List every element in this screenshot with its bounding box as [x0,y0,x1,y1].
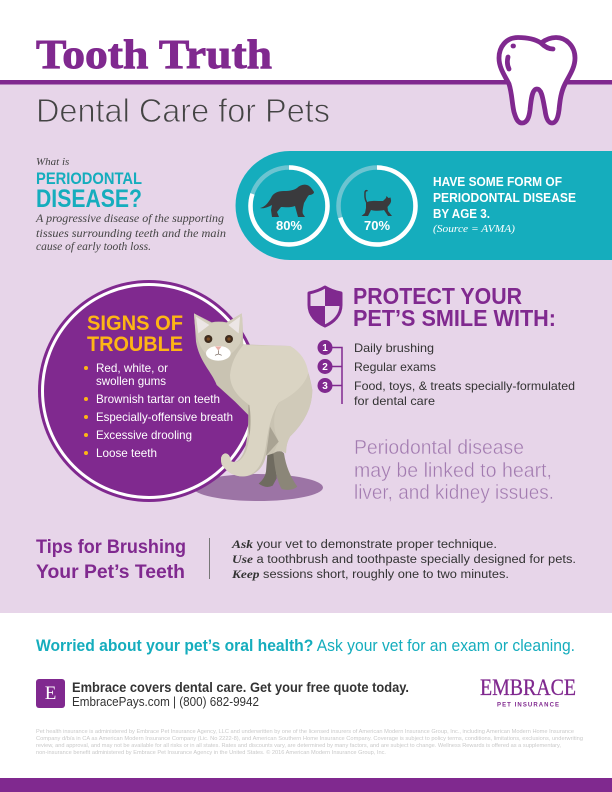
text block: what is periodontal disease: tissues surrounding teeth and the main [36,228,226,240]
fine print: Company d/b/a in CA as American Modern Insurance Company (Lic. No 2222-8), and American Southern Home Insurance Company. Coverage is subject to policy terms, conditions, limitations, exclusions, underwriting [36,736,583,742]
cat far leg [259,452,277,487]
footer band [0,778,612,792]
numbered list: protection steps: 2 [322,362,328,373]
text block: what is periodontal disease: PERIODONTAL [36,170,142,188]
chart: dog 80 percent ring: 80% [276,218,302,233]
numbered list: protection steps: 3 [322,381,328,392]
call to action: oral health: Worried about your pet’s oral health? Ask your vet for an exam or cleaning. [36,636,575,655]
statistic text [433,175,576,235]
heading: protect your pet's smile [353,283,556,331]
callout: linked issues: may be linked to heart, [354,460,552,482]
numbered list: protection steps: Regular exams [354,360,436,374]
cat shaded wedges [248,405,279,456]
icon: shield [309,287,341,326]
text block: what is periodontal disease: cause of early tooth loss. [36,241,151,253]
list: signs: Excessive drooling [96,428,192,442]
text block: what is periodontal disease: DISEASE? [36,185,142,213]
cat shadow [193,474,323,501]
text block: brushing tips: Keep sessions short, roughly one to two minutes. [231,567,509,581]
text block: what is periodontal disease: What is [36,156,69,168]
icon: tooth [499,38,575,123]
panel: statistics pill [236,151,612,260]
callout: linked issues: liver, and kidney issues. [354,482,554,504]
fine print [36,729,583,756]
statistic text: BY AGE 3. [433,207,490,221]
callout: linked issues [354,437,554,504]
cat near leg [273,451,297,490]
numbered list: protection steps: for dental care [354,394,435,408]
logo: embrace pet insurance: PET INSURANCE [497,702,559,708]
logo: embrace pet insurance: EMBRACE [480,675,576,700]
cat silhouette [194,313,312,476]
heading: tips for brushing: Tips for Brushing [36,536,186,558]
title: Tooth Truth [36,31,272,77]
list: signs: Especially-offensive breath [96,410,233,424]
callout: linked issues: Periodontal disease [354,437,524,459]
numbered list: protection steps [318,340,575,408]
statistic text: HAVE SOME FORM OF [433,175,562,189]
cat ears [196,317,209,333]
cat head [194,313,243,361]
text block: what is periodontal disease: A progressive disease of the supporting [35,213,224,225]
cat muzzle [206,346,231,361]
list: signs: Red, white, or [96,361,168,375]
cat body and tail [221,345,308,476]
chart: cat 70 percent ring: 70% [364,218,390,233]
text block: what is periodontal disease [35,156,226,253]
heading: tips for brushing: Your Pet’s Teeth [36,561,185,583]
lilac background panel [0,82,612,613]
logo: embrace pet insurance [480,675,576,708]
chart: cat 70 percent ring [338,168,416,244]
chart: dog 80 percent ring [250,168,328,244]
list: signs [84,361,233,460]
heading: signs of trouble: SIGNS OF [87,312,183,335]
numbered list: protection steps: Daily brushing [354,341,434,355]
fine print: non-insurance benefit administered by Embrace Pet Insurance Agency in the United States. © 2016 American Modern Insurance Group, Inc. [36,749,386,756]
list: signs: Brownish tartar on teeth [96,392,220,406]
statistic text: (Source = AVMA) [433,224,516,235]
icon: embrace E badge: E [45,683,56,704]
heading: protect your pet's smile: PET’S SMILE WITH: [353,305,556,331]
text block: brushing tips: Ask your vet to demonstrate proper technique. [231,537,497,551]
cat eyes [204,335,212,343]
header rule [0,80,612,84]
heading: protect your pet's smile: PROTECT YOUR [353,283,522,309]
list: signs: swollen gums [96,374,166,388]
heading: signs of trouble [87,312,183,356]
illustration: cat [194,313,312,490]
subtitle: Dental Care for Pets [36,92,330,129]
panel: signs of trouble circle [38,280,260,502]
text block: brushing tips [231,537,576,581]
text block: embrace quote: EmbracePays.com | (800) 682-9942 [72,694,259,709]
numbered list: protection steps: Food, toys, & treats specially-formulated [354,379,575,393]
heading: tips for brushing [36,536,186,583]
numbered list: protection steps: 1 [322,343,328,354]
statistic text: PERIODONTAL DISEASE [433,191,576,205]
cat haunch [273,373,312,453]
icon: embrace E badge [36,679,65,708]
list: signs: Loose teeth [96,446,157,460]
heading: signs of trouble: TROUBLE [87,333,183,356]
text block: embrace quote [72,680,409,709]
fine print: review, and approval, and may not be available for all risks or in all states. Rates and discounts vary, are determined by many factors, and are subject to change. Wellness Rewards is offered as a supplementary, [36,743,561,749]
text block: brushing tips: Use a toothbrush and toothpaste specially designed for pets. [232,552,576,566]
fine print: Pet health insurance is administered by Embrace Pet Insurance Agency, LLC and underwritten by one of the licensed insurers of American Modern Insurance Group, Inc., including American Modern Home Insurance [36,729,574,735]
text block: embrace quote: Embrace covers dental care. Get your free quote today. [72,680,409,695]
